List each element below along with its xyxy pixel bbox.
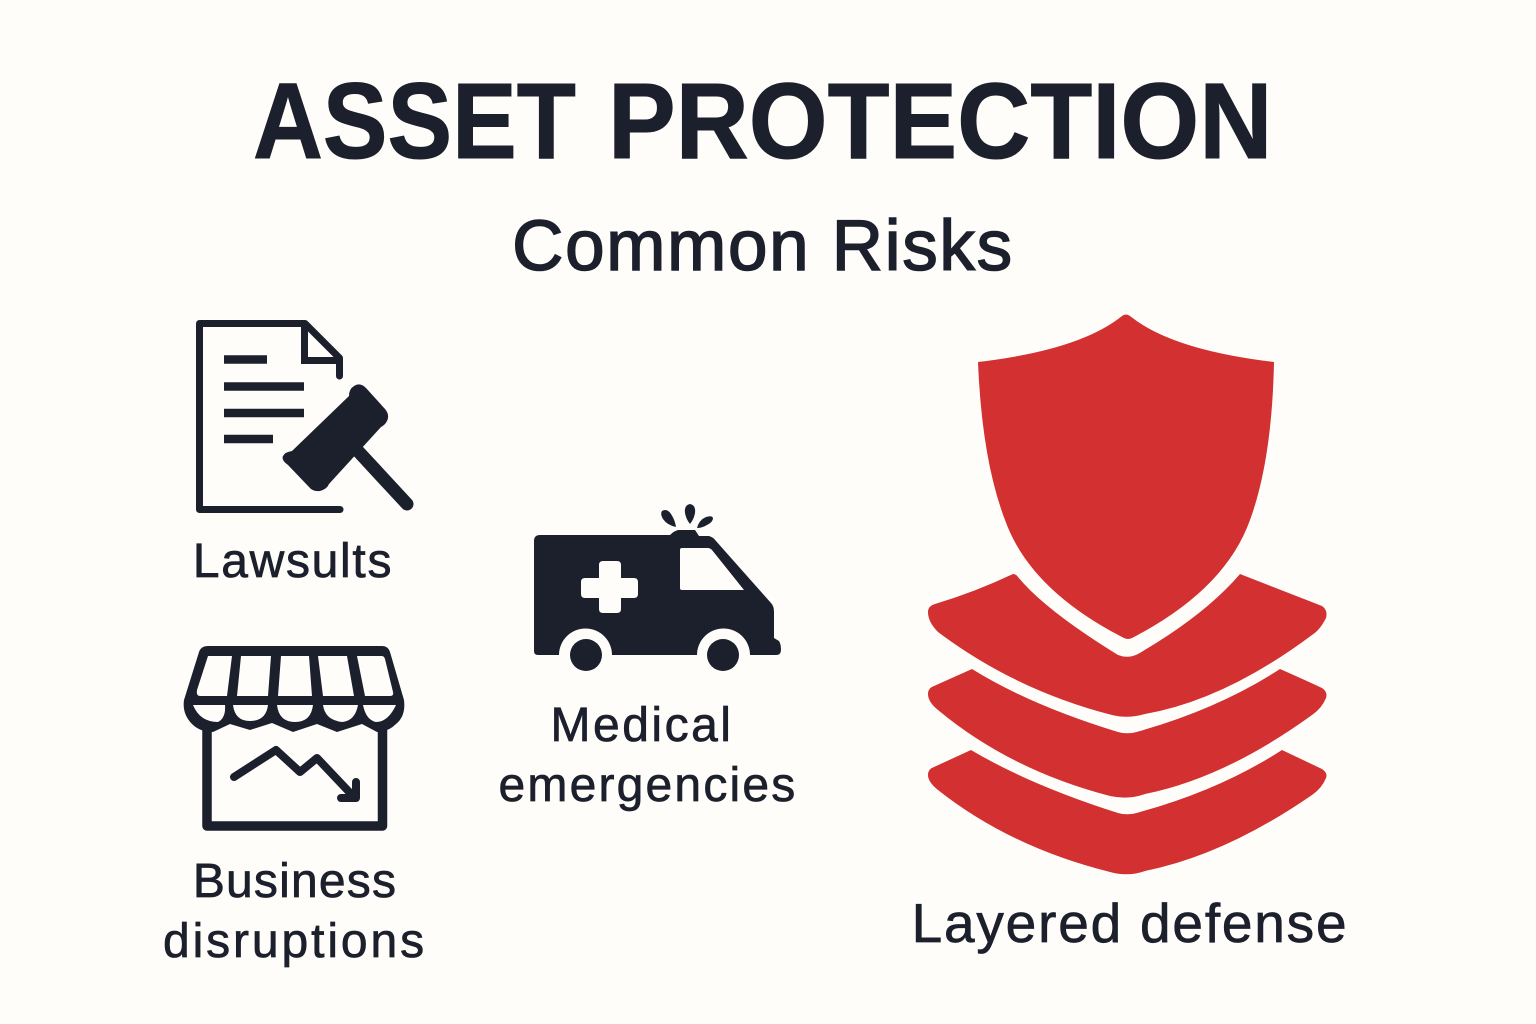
title: PROTECTION (608, 60, 1272, 181)
label: business disruptions: Business (193, 855, 397, 908)
label: medical emergencies: Medical (551, 699, 733, 752)
label: layered defense: Layered defense (912, 892, 1348, 954)
icon: storefront with falling chart (184, 646, 404, 831)
label: business disruptions: disruptions (163, 915, 427, 968)
icon: layered shield (928, 314, 1326, 874)
layer 2 (928, 669, 1326, 798)
label: lawsuits: Lawsults (193, 535, 393, 588)
icon: ambulance (534, 504, 781, 671)
icon: lawsuit document and gavel (196, 320, 414, 513)
label: medical emergencies: emergencies (498, 759, 798, 812)
label: business disruptions (163, 855, 427, 968)
layer 3 (928, 750, 1326, 874)
subtitle: Common Risks (512, 207, 1014, 286)
layer 1 (928, 574, 1326, 717)
title: ASSET (253, 60, 576, 181)
title (253, 60, 1272, 181)
label: medical emergencies (498, 699, 798, 812)
shield (978, 314, 1274, 639)
